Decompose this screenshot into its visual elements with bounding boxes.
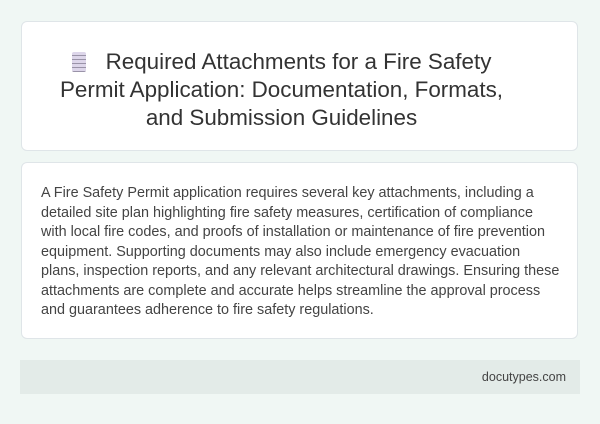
title: Permit Application: Documentation, Formats, <box>60 77 503 102</box>
title <box>60 49 503 130</box>
icon: document <box>72 52 86 72</box>
title: and Submission Guidelines <box>146 105 417 130</box>
text block: description: and guarantees adherence to fire safety regulations. <box>41 302 374 318</box>
title: Required Attachments for a Fire Safety <box>106 49 491 74</box>
text block: description: attachments are complete and accurate helps streamline the approval process <box>41 282 540 298</box>
panel: description card <box>21 162 578 339</box>
footer text: source: docutypes.com <box>482 370 566 384</box>
footer bar <box>20 360 580 394</box>
text block: description: equipment. Supporting documents may also include emergency evacuation <box>41 244 520 260</box>
text block: description: A Fire Safety Permit application requires several key attachments, including a <box>41 185 534 201</box>
text block: description <box>41 185 559 318</box>
panel: title card <box>21 21 578 151</box>
text block: description: with local fire codes, and proofs of installation or maintenance of fire prevention <box>41 224 545 240</box>
text block: description: detailed site plan highlighting fire safety measures, certification of compliance <box>41 204 533 220</box>
text block: description: plans, inspection reports, and any relevant architectural drawings. Ensuring these <box>41 263 559 279</box>
